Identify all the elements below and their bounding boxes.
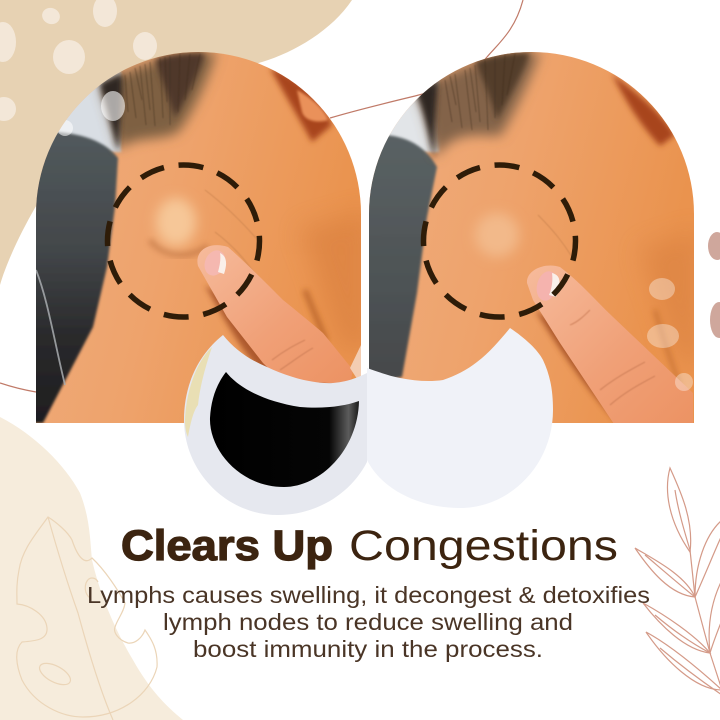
thin line lower left: [0, 383, 36, 392]
cream edge: [185, 347, 212, 437]
background behind neck: [48, 71, 122, 154]
leaf outline bottom left: [17, 517, 157, 720]
ear shadow: [612, 74, 675, 146]
hair: [416, 52, 540, 160]
background behind neck: [382, 80, 440, 154]
patch backing: [184, 335, 367, 515]
skin creases: [205, 190, 256, 269]
title: Congestions: [349, 522, 618, 570]
title: [121, 522, 618, 570]
black gel crescent: [210, 372, 359, 487]
body text: Lymphs causes swelling, it decongest & detoxifies: [87, 582, 650, 608]
finger shadow: [204, 284, 332, 384]
reduced node: [475, 213, 519, 257]
decorative dots top left: [0, 0, 157, 121]
body text: boost immunity in the process.: [193, 636, 543, 662]
dashed circle left: [103, 160, 264, 322]
jacket zipper: [36, 270, 65, 385]
skin creases: [538, 215, 575, 262]
plant outline bottom right: [635, 468, 720, 695]
right side dots: [708, 232, 720, 338]
product: patch with black gel on left: [184, 335, 367, 515]
ear: [270, 68, 332, 142]
dashed circle right: [419, 160, 580, 322]
photo: reduced lymph node (after): [362, 52, 700, 430]
photo: swollen lymph node (before): [30, 52, 370, 423]
decorative cream blob bottom left: [0, 417, 183, 720]
body text: [87, 582, 650, 662]
finger: [197, 245, 353, 384]
swollen node: [150, 198, 208, 255]
jacket: [30, 132, 118, 423]
hair: [100, 52, 216, 152]
finger shadow: [534, 310, 612, 420]
finger: [527, 265, 693, 430]
shoulder shadow: [652, 244, 694, 347]
title: Clears Up: [121, 522, 333, 570]
product: patch white side on right: [367, 328, 553, 508]
shoulder shadow: [308, 220, 361, 342]
decorative beige blob top left: [0, 0, 352, 285]
thin curved line: [330, 0, 523, 118]
body text: lymph nodes to reduce swelling and: [163, 609, 573, 635]
jacket: [362, 135, 437, 385]
